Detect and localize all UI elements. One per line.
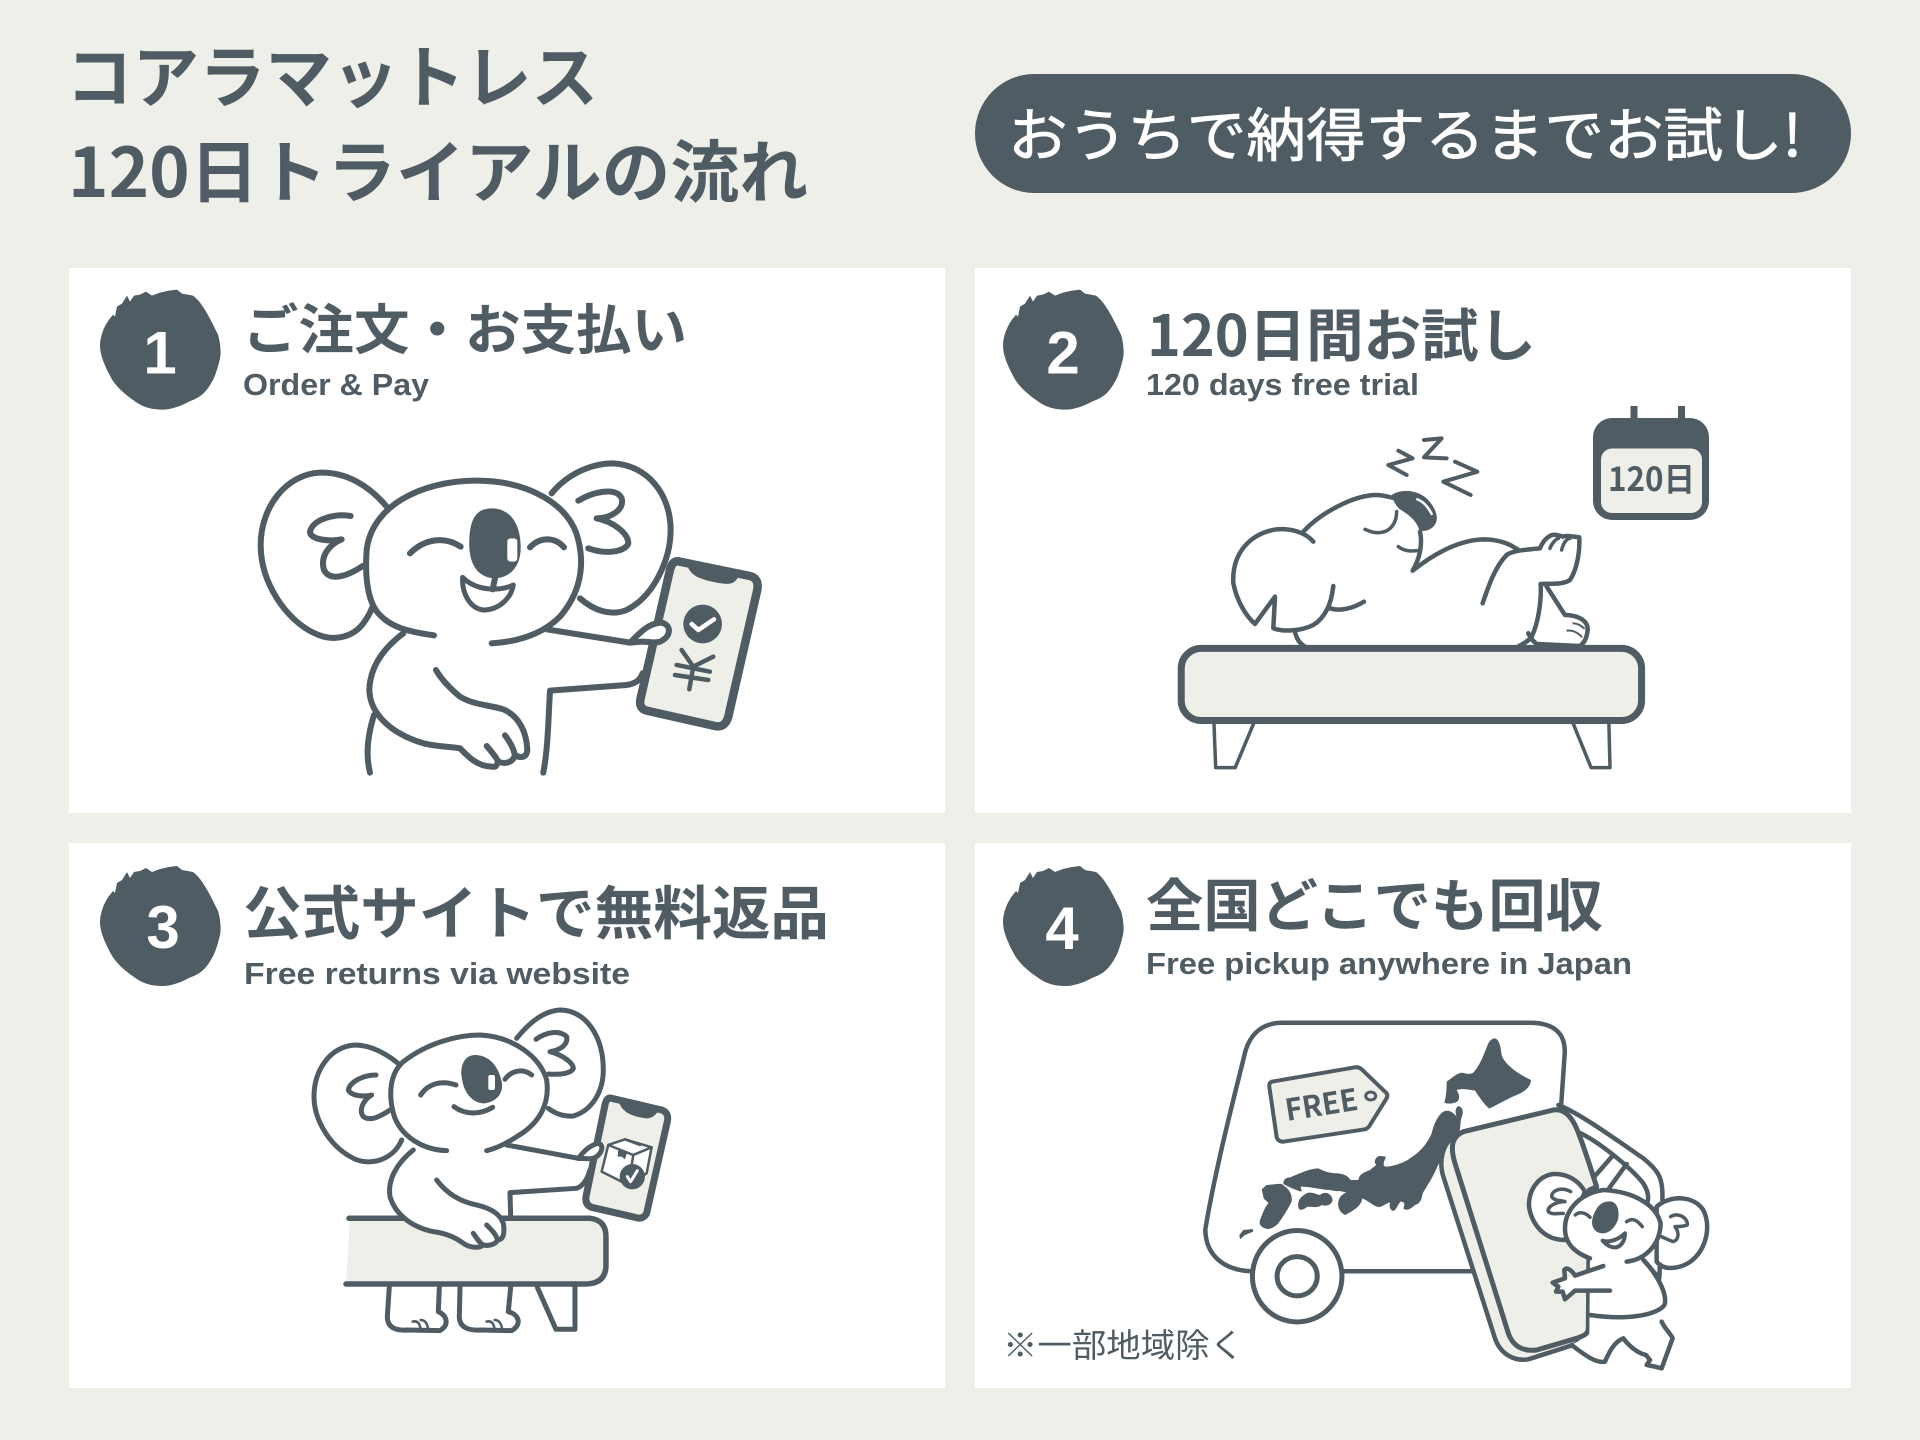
banner pill [975,74,1851,193]
step 3 number badge [100,866,221,986]
mattress upright [1441,1132,1578,1360]
step 3 subheading: Free returns via website [244,956,630,991]
step 4 subheading: Free pickup anywhere in Japan [1146,946,1632,981]
phone [586,1098,668,1218]
step 4 number badge [1003,866,1124,986]
phone [640,561,758,726]
step 4 heading: 全国どこでも回収 [1146,861,1603,943]
step 1 subheading: Order & Pay [243,367,430,402]
map of Japan [1239,1038,1531,1239]
illustration: koala returning by phone [314,1010,668,1331]
step 3 heading: 公式サイトで無料返品 [243,867,829,951]
illustration: delivery van [1205,1023,1565,1322]
FREE tag [1269,1067,1387,1142]
koala head [1565,1190,1661,1264]
banner pill: おうちで納得するまでお試し! [1008,89,1802,173]
step 1 number badge [100,290,221,410]
van cab [1558,1105,1662,1200]
illustration: koala sleeping [1233,438,1588,647]
FREE tag: FREE [1282,1075,1361,1130]
panel: step 1 order and pay [69,268,945,813]
panel: step 3 free returns [69,843,945,1388]
step 2 heading: 120日間お試し [1147,291,1536,373]
panel: step 4 free pickup [975,843,1851,1388]
icon: calendar 120 days [1593,406,1709,520]
illustration: koala with upright mattress [1441,1105,1707,1368]
koala ears [1529,1174,1585,1240]
step 1 heading: ご注文・お支払い [243,286,687,365]
panel: step 2 120 day trial [975,268,1851,813]
title [66,23,808,217]
illustration: mattress [1181,648,1642,768]
mattress [346,1218,606,1284]
step 1 number badge: 1 [143,320,177,387]
step 3 number badge: 3 [146,894,180,961]
koala body [1572,1258,1673,1368]
icon: calendar 120 days: 120日 [1608,453,1695,501]
footnote: ※一部地域除く [1003,1319,1244,1367]
title: コアラマットレス [66,23,598,122]
step 2 number badge: 2 [1046,320,1080,387]
step 2 number badge [1003,290,1124,410]
illustration: koala paying with phone [261,463,758,773]
step 2 subheading: 120 days free trial [1146,367,1419,402]
step 4 number badge: 4 [1045,895,1079,962]
title: 120日トライアルの流れ [68,118,808,217]
